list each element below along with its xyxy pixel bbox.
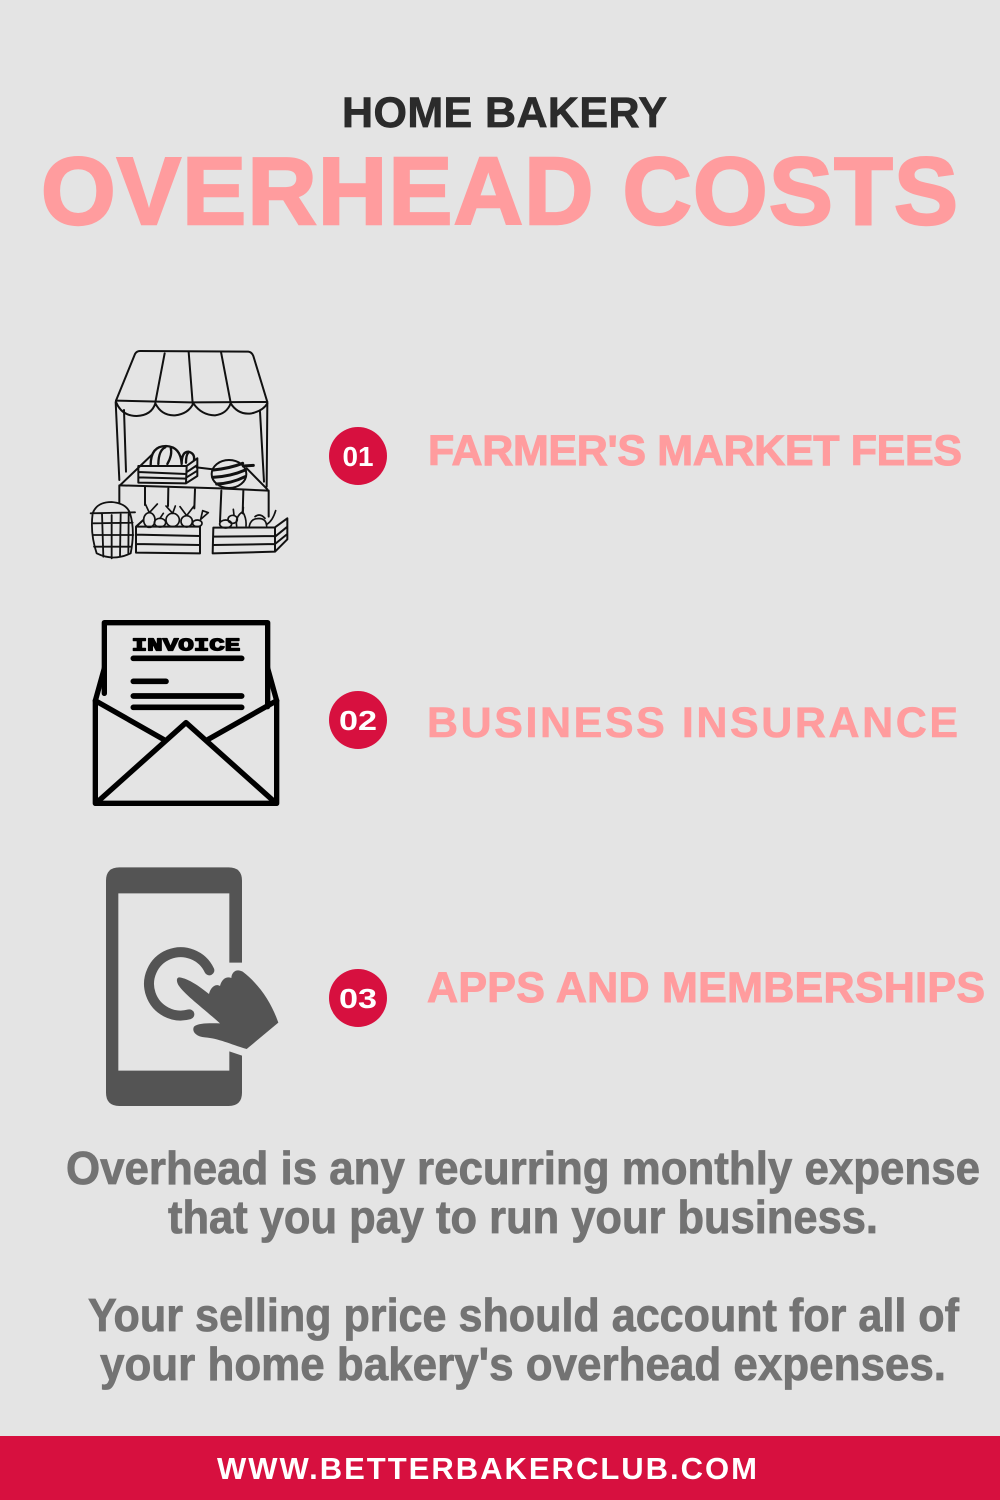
label: farmer's market fees: FARMER'S MARKET FEES [428, 427, 962, 475]
explanatory text: your home bakery's overhead expenses. [100, 1338, 946, 1390]
icon: farmer's market stall [91, 351, 287, 558]
footer bar [0, 1436, 1000, 1500]
title line: home bakery: HOME BAKERY [342, 89, 667, 137]
explanatory text: that you pay to run your business. [168, 1191, 878, 1243]
label: business insurance: BUSINESS INSURANCE [427, 699, 958, 747]
number badge 02 [329, 691, 387, 749]
number badge 02: 02 [339, 705, 377, 736]
title [41, 89, 958, 245]
invoice heading: INVOICE [132, 635, 240, 657]
item 03 [329, 964, 985, 1027]
item 02 [329, 691, 958, 749]
explanatory text [66, 1142, 980, 1390]
icon: phone with tapping hand [106, 867, 278, 1106]
number badge 03 [329, 969, 387, 1027]
explanatory text: Overhead is any recurring monthly expense [66, 1142, 980, 1194]
website url: WWW.BETTERBAKERCLUB.COM [217, 1451, 757, 1486]
icon: invoice in envelope [95, 623, 277, 803]
item 01 [329, 427, 962, 485]
label: apps and memberships: APPS AND MEMBERSHIPS [427, 964, 985, 1012]
title line: overhead costs: OVERHEAD COSTS [41, 138, 958, 245]
number badge 01 [329, 427, 387, 485]
number badge 03: 03 [339, 983, 377, 1014]
explanatory text: Your selling price should account for all of [88, 1289, 960, 1341]
number badge 01: 01 [342, 441, 374, 472]
